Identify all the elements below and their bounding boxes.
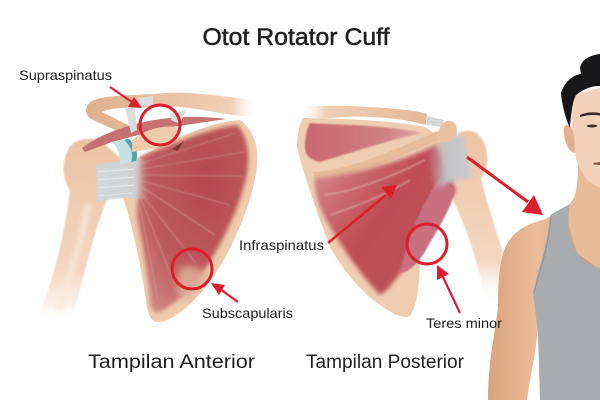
circle: subscapularis	[172, 249, 212, 289]
tank top	[533, 204, 600, 400]
acromion tendon	[427, 116, 444, 127]
posterior shoulder illustration	[297, 106, 503, 317]
anterior shoulder illustration	[38, 93, 257, 322]
humerus anterior	[38, 139, 128, 320]
supraspinatus band anterior	[82, 117, 226, 152]
subscapularis fibres	[140, 133, 244, 300]
scapula anterior	[123, 120, 257, 322]
arrow: infraspinatus	[328, 185, 397, 243]
teal cartilage	[112, 139, 135, 164]
arrow: to person	[467, 157, 543, 215]
neck	[568, 160, 600, 270]
arrow: supraspinatus	[110, 87, 142, 108]
ligaments anterior	[125, 96, 186, 133]
dark notch	[172, 141, 184, 151]
eyebrow and eye	[580, 112, 600, 128]
clavicle posterior	[300, 106, 427, 125]
arm and shoulder	[488, 205, 600, 400]
ear	[564, 125, 575, 153]
infraspinatus highlights	[325, 160, 425, 215]
clavicle anterior	[86, 93, 257, 134]
tendon posterior	[425, 132, 473, 190]
label: supraspinatus: Supraspinatus	[19, 67, 112, 83]
subscapularis muscle	[137, 125, 248, 313]
acromion knob	[437, 121, 457, 142]
label: subscapularis: Subscapularis	[202, 305, 293, 321]
lower bone patch in circle	[176, 266, 210, 302]
person	[488, 54, 600, 400]
hair	[561, 54, 600, 128]
title: Otot Rotator Cuff	[202, 24, 390, 51]
caption: anterior view: Tampilan Anterior	[88, 352, 256, 373]
circle: supraspinatus	[140, 105, 180, 145]
arrow: teres minor	[437, 265, 460, 313]
arrow: subscapularis	[211, 283, 238, 302]
label: teres minor: Teres minor	[426, 315, 502, 331]
scapula posterior	[297, 118, 457, 317]
caption: posterior view: Tampilan Posterior	[306, 352, 465, 373]
circle: teres minor	[407, 224, 447, 264]
mouth	[593, 162, 600, 165]
infraspinatus muscle	[315, 145, 456, 295]
humerus highlight	[54, 205, 92, 312]
face	[572, 88, 600, 187]
coracoid bone	[132, 126, 179, 152]
humerus posterior	[453, 131, 503, 306]
subscapularis tendon	[96, 158, 150, 202]
label: infraspinatus: Infraspinatus	[239, 237, 324, 253]
scapular spine	[313, 131, 440, 179]
supraspinatus muscle posterior	[305, 123, 423, 162]
teres minor muscle	[400, 178, 455, 273]
